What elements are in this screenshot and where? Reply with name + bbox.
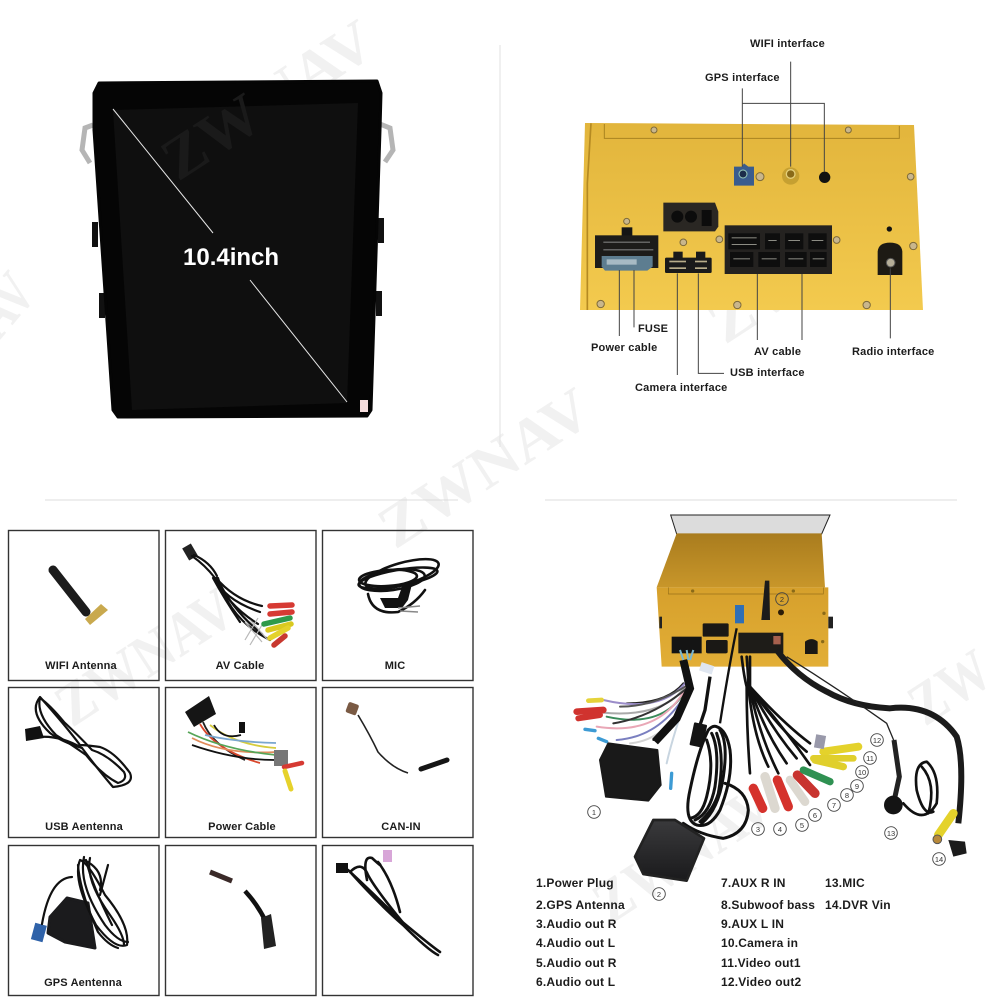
plate details (587, 123, 917, 310)
card: adapter cable (166, 846, 316, 996)
unit: gold top (657, 533, 825, 587)
leader lines (619, 62, 890, 375)
watermark: ZWNAV repeated: ZWNAV (581, 772, 785, 936)
interface labels: Radio interface (852, 346, 934, 358)
marker numbers: 3 (756, 825, 760, 834)
marker numbers: 1 (592, 808, 596, 817)
connector: radio (878, 226, 902, 275)
panel: tablet screen (82, 80, 393, 417)
interface labels: WIFI interface (750, 38, 825, 50)
card: USB Aentenna: USB Aentenna (45, 821, 124, 833)
card: Power Cable: Power Cable (208, 821, 276, 833)
legend: numbered part list: 8.Subwoof bass (721, 898, 815, 912)
watermark: ZWNAV repeated: ZWNAV (366, 375, 603, 561)
unit: silver top lid (671, 515, 830, 534)
card: GPS Aentenna: GPS Aentenna (44, 977, 123, 989)
legend: numbered part list: 6.Audio out L (536, 975, 615, 989)
legend: numbered part list: 2.GPS Antenna (536, 898, 625, 912)
legend: numbered part list: 11.Video out1 (721, 956, 801, 970)
legend: numbered part list: 13.MIC (825, 876, 865, 890)
marker numbers: 12 (873, 736, 881, 745)
legend: numbered part list: 4.Audio out L (536, 936, 615, 950)
legend: numbered part list: 5.Audio out R (536, 956, 617, 970)
card: CAN-IN (322, 688, 473, 838)
connector: GPS (734, 163, 754, 186)
connector: camera + USB (665, 252, 712, 273)
interface labels (591, 38, 934, 394)
card: USB Aentenna (8, 688, 159, 838)
tablet watermark reflection: ZW (149, 80, 273, 193)
marker numbers: 5 (800, 821, 804, 830)
harness: USB cable (689, 662, 714, 748)
marker numbers: 8 (845, 791, 849, 800)
panel: rear interface diagram (580, 38, 934, 394)
interface labels: AV cable (754, 346, 801, 358)
marker numbers: 6 (813, 811, 817, 820)
interface labels: USB interface (730, 367, 805, 379)
interface labels: Power cable (591, 342, 657, 354)
numbered markers (588, 593, 945, 900)
interface labels: GPS interface (705, 72, 780, 84)
interface labels: FUSE (638, 323, 668, 335)
card: USB + pink connector cable (322, 846, 473, 996)
marker numbers: 9 (855, 782, 859, 791)
icon: mounting brackets (82, 124, 393, 318)
harness: mic and DVR (777, 650, 967, 857)
legend: numbered part list: 7.AUX R IN (721, 876, 786, 890)
marker numbers: 4 (778, 825, 782, 834)
legend: numbered part list (536, 876, 891, 989)
tablet glass (113, 103, 358, 410)
card: AV Cable (166, 530, 316, 680)
panel: wiring diagram (536, 515, 967, 989)
connector: mic hole (819, 172, 830, 183)
marker numbers: 2 (657, 890, 661, 899)
connector: host (663, 203, 718, 231)
marker numbers: 13 (887, 829, 895, 838)
marker numbers: 14 (935, 855, 943, 864)
legend: numbered part list: 1.Power Plug (536, 876, 614, 890)
card: WIFI Antenna (8, 530, 159, 680)
legend: numbered part list: 9.AUX L IN (721, 917, 784, 931)
watermark: ZWNAV repeated: ZWNAV (696, 173, 929, 356)
unit: gold rear (657, 581, 833, 667)
harness: AV fan-out with RCA plugs (742, 657, 858, 808)
legend: numbered part list: 12.Video out2 (721, 975, 802, 989)
connector: power + fuse (595, 227, 658, 271)
card: AV Cable: AV Cable (216, 660, 264, 672)
tablet body (94, 81, 381, 417)
label: 10.4inch: 10.4inch (183, 244, 279, 271)
diagonal line (113, 109, 347, 402)
interface labels: Camera interface (635, 382, 727, 394)
legend: numbered part list: 10.Camera in (721, 936, 798, 950)
marker numbers: 10 (858, 768, 866, 777)
card: MIC (322, 530, 473, 680)
card: CAN-IN: CAN-IN (381, 821, 421, 833)
marker numbers: 7 (832, 801, 836, 810)
harness: GPS antenna (635, 628, 748, 881)
panel: accessory grid (8, 530, 473, 996)
legend: numbered part list: 14.DVR Vin (825, 898, 891, 912)
yellow rear plate (580, 123, 923, 310)
marker numbers: 11 (866, 754, 874, 763)
watermark: ZWNAV repeated: ZWNAV (149, 7, 386, 193)
card: MIC: MIC (385, 660, 405, 672)
marker numbers: 2 (780, 595, 784, 604)
card: GPS Aentenna (8, 846, 159, 996)
card: WIFI Antenna: WIFI Antenna (45, 660, 118, 672)
legend: numbered part list: 3.Audio out R (536, 917, 617, 931)
card: Power Cable (166, 688, 316, 838)
connector: AV block (725, 225, 832, 274)
marker numbers (592, 595, 943, 899)
watermark: ZWNAV repeated: ZWNAV (43, 575, 247, 739)
harness: power plug and wires (577, 650, 693, 801)
connector: WIFI (782, 167, 799, 185)
